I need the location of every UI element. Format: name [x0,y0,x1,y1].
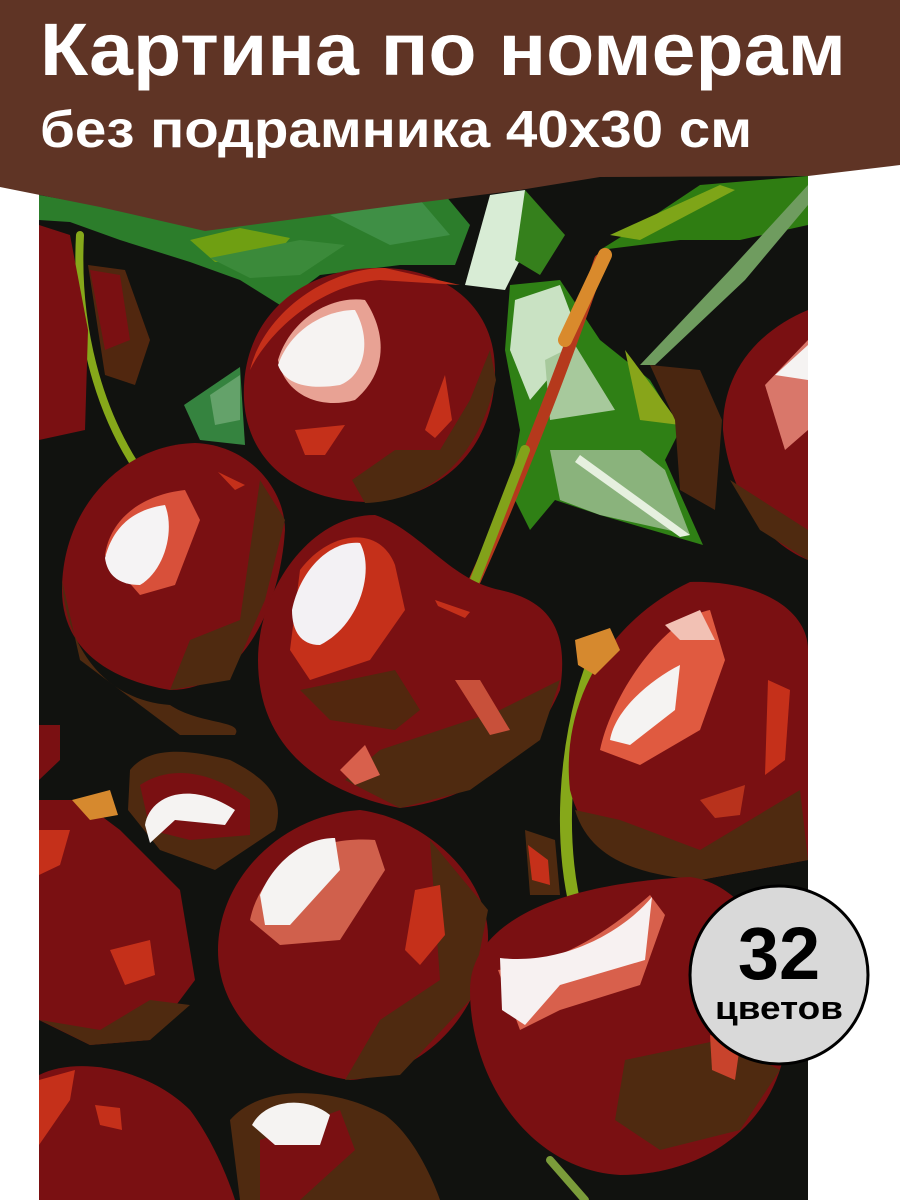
painting: cherries on black background [39,170,808,1200]
cherries [39,225,808,1200]
leaves [39,176,808,545]
badge label: цветов [715,990,843,1026]
stems [40,235,605,1200]
subtitle: без подрамника 40х30 см [40,101,752,159]
badge number: 32 [738,912,820,995]
title: Картина по номерам [40,8,846,91]
header banner [0,0,900,231]
badge: 32 colors [690,886,868,1064]
